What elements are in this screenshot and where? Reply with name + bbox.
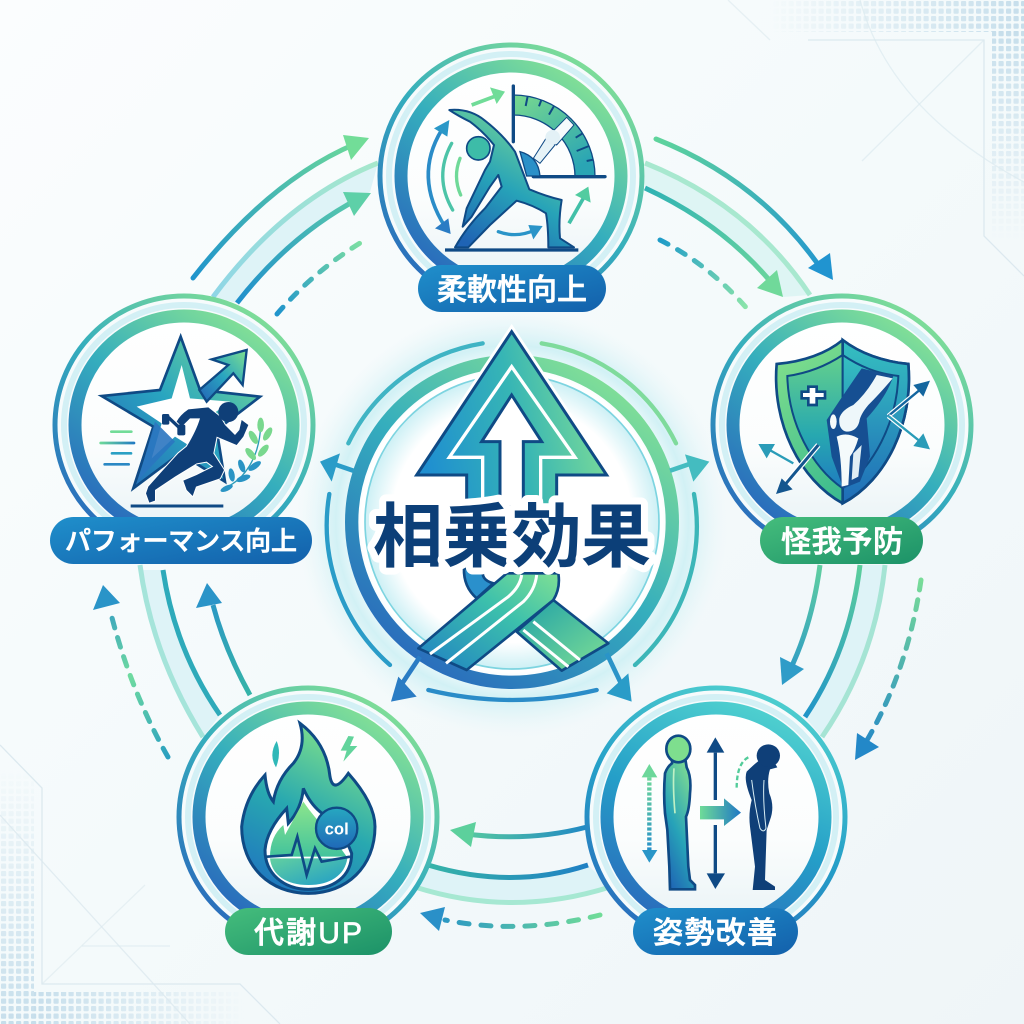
label: パフォーマンス向上 bbox=[65, 526, 297, 556]
arrow: performance to flexibility (outer) bbox=[193, 135, 369, 278]
badge rings bbox=[587, 688, 845, 946]
icon: star, arrow and runner bbox=[99, 337, 274, 506]
label bbox=[633, 908, 798, 955]
arrow: posture to metabolism (dashed) bbox=[420, 907, 600, 931]
arrow: performance to flexibility (inner) bbox=[237, 192, 371, 303]
panel: injury prevention bbox=[713, 296, 971, 564]
panel: flexibility bbox=[380, 45, 642, 312]
label: 代謝UP bbox=[254, 917, 362, 950]
arrow: performance to flexibility (dashed) bbox=[277, 240, 365, 314]
big upward arrow bbox=[417, 332, 607, 507]
inner disc bbox=[365, 375, 659, 669]
label: 怪我予防 bbox=[781, 526, 903, 559]
arrow: posture to metabolism (solid) bbox=[450, 822, 587, 847]
arrow: injury prevention to posture (solid) bbox=[780, 565, 820, 685]
label: 柔軟性向上 bbox=[437, 274, 587, 307]
label: 姿勢改善 bbox=[653, 917, 777, 950]
badge rings bbox=[380, 45, 642, 307]
arrow: metabolism to performance (solid) bbox=[196, 583, 250, 695]
arrow: flexibility to injury prevention (dashed) bbox=[660, 240, 750, 312]
panel: central synergy emblem bbox=[297, 307, 727, 737]
panel: metabolism bbox=[179, 688, 437, 955]
arrow: injury prevention to posture (dashed) bbox=[855, 580, 921, 760]
icon: flame with calorie badge bbox=[242, 723, 375, 893]
label bbox=[418, 265, 606, 312]
label bbox=[225, 908, 392, 955]
icon: posture comparison bbox=[642, 736, 780, 890]
badge rings bbox=[713, 296, 971, 554]
arrow: flexibility to injury prevention (inner) bbox=[645, 188, 783, 297]
outward arrows bbox=[320, 453, 709, 702]
label bbox=[760, 517, 923, 564]
main ring bbox=[352, 362, 672, 682]
cycle bands between steps bbox=[140, 163, 885, 902]
arrow: flexibility to injury prevention (outer) bbox=[656, 139, 833, 280]
label bbox=[50, 517, 312, 564]
icon: shield with knee joint bbox=[758, 340, 930, 503]
icon: stretching figure and range-of-motion gauge bbox=[428, 86, 605, 250]
arrow: metabolism to performance (dashed) bbox=[93, 585, 168, 757]
panel: posture bbox=[587, 688, 845, 955]
badge rings bbox=[55, 296, 313, 554]
panel: performance bbox=[50, 296, 313, 564]
badge rings bbox=[179, 688, 437, 946]
lower crossing strands bbox=[418, 568, 608, 671]
icon: flame with calorie badge: col bbox=[325, 819, 349, 838]
central title: 相乗効果 bbox=[373, 498, 651, 576]
outer segmented ring bbox=[327, 343, 697, 700]
